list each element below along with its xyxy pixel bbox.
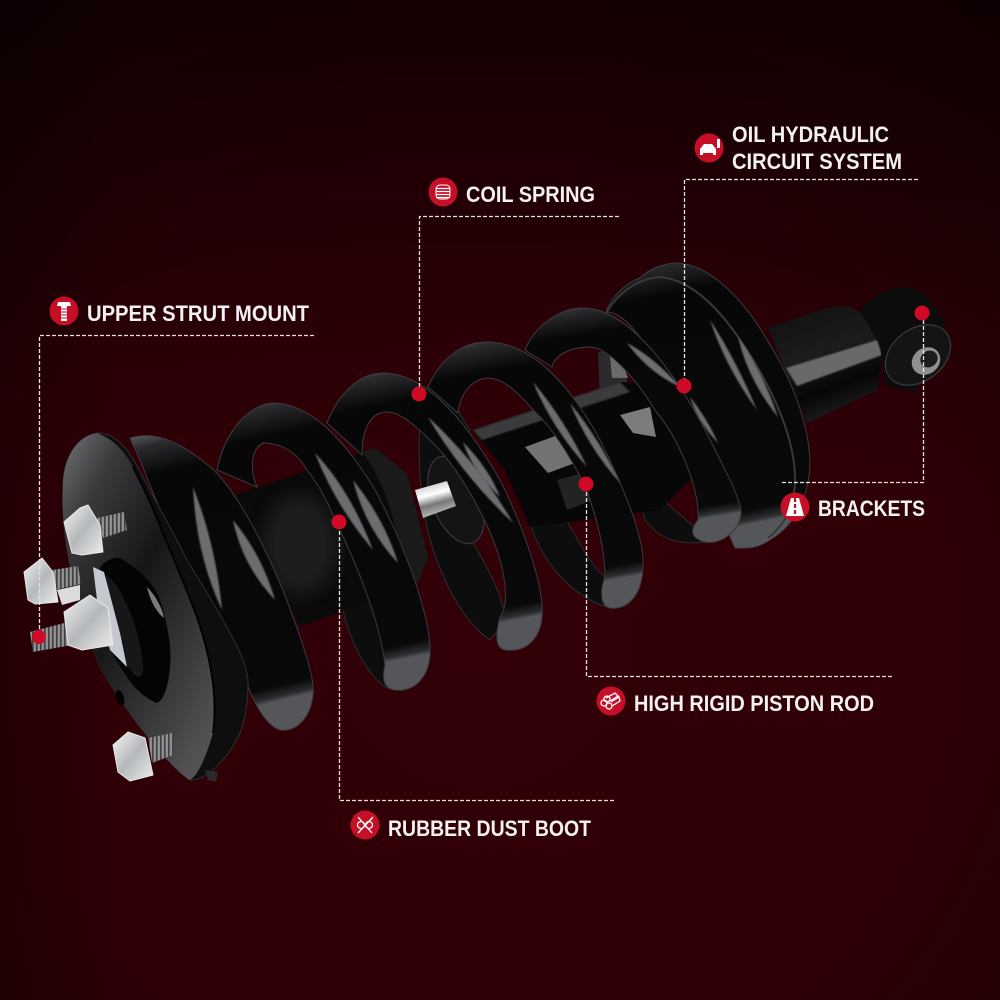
strut assembly <box>24 263 962 782</box>
heading: oil hydraulic circuit system: CIRCUIT SYSTEM <box>732 149 902 174</box>
icon: crossed chain <box>350 810 380 840</box>
callout: brackets <box>780 306 930 522</box>
spring: front coil turn three <box>327 373 542 650</box>
callout: coil spring: COIL SPRING <box>466 182 595 207</box>
mounting bolts <box>24 505 173 781</box>
spring: front coil turn four <box>428 342 643 608</box>
spring: end coils <box>606 263 810 548</box>
callout: rubber dust boot: RUBBER DUST BOOT <box>388 816 591 841</box>
reservoir mid cylinder <box>473 382 700 527</box>
callout: brackets: BRACKETS <box>818 496 925 521</box>
callout: coil spring <box>412 178 619 402</box>
icon: car <box>694 134 724 162</box>
callout: high rigid piston rod <box>578 476 892 716</box>
upper strut mount plate <box>63 433 248 782</box>
piston body upper shaft <box>768 306 882 423</box>
icon: rods <box>596 686 626 716</box>
piston plate behind rod <box>417 448 495 552</box>
heading: oil hydraulic circuit system: OIL HYDRAULIC <box>732 122 889 147</box>
callout: oil hydraulic circuit system <box>676 122 918 394</box>
heading: oil hydraulic circuit system <box>732 122 902 174</box>
bracket eye mount <box>860 287 962 398</box>
icon: spring <box>428 178 458 206</box>
icon: screw <box>50 296 78 326</box>
spring: front coil turn two <box>217 403 430 690</box>
callout: rubber dust boot <box>332 514 614 841</box>
callout: high rigid piston rod: HIGH RIGID PISTON ROD <box>634 691 874 716</box>
callout: upper strut mount: UPPER STRUT MOUNT <box>87 301 310 326</box>
callout: upper strut mount <box>32 296 314 644</box>
icon: road <box>780 492 810 522</box>
rubber dust boot cylinder <box>235 448 428 627</box>
spring: rear coil segments <box>343 350 705 690</box>
chrome piston rod <box>415 481 456 518</box>
spring: front coil turn one <box>130 436 313 730</box>
spring: front coil turn five <box>525 308 741 542</box>
